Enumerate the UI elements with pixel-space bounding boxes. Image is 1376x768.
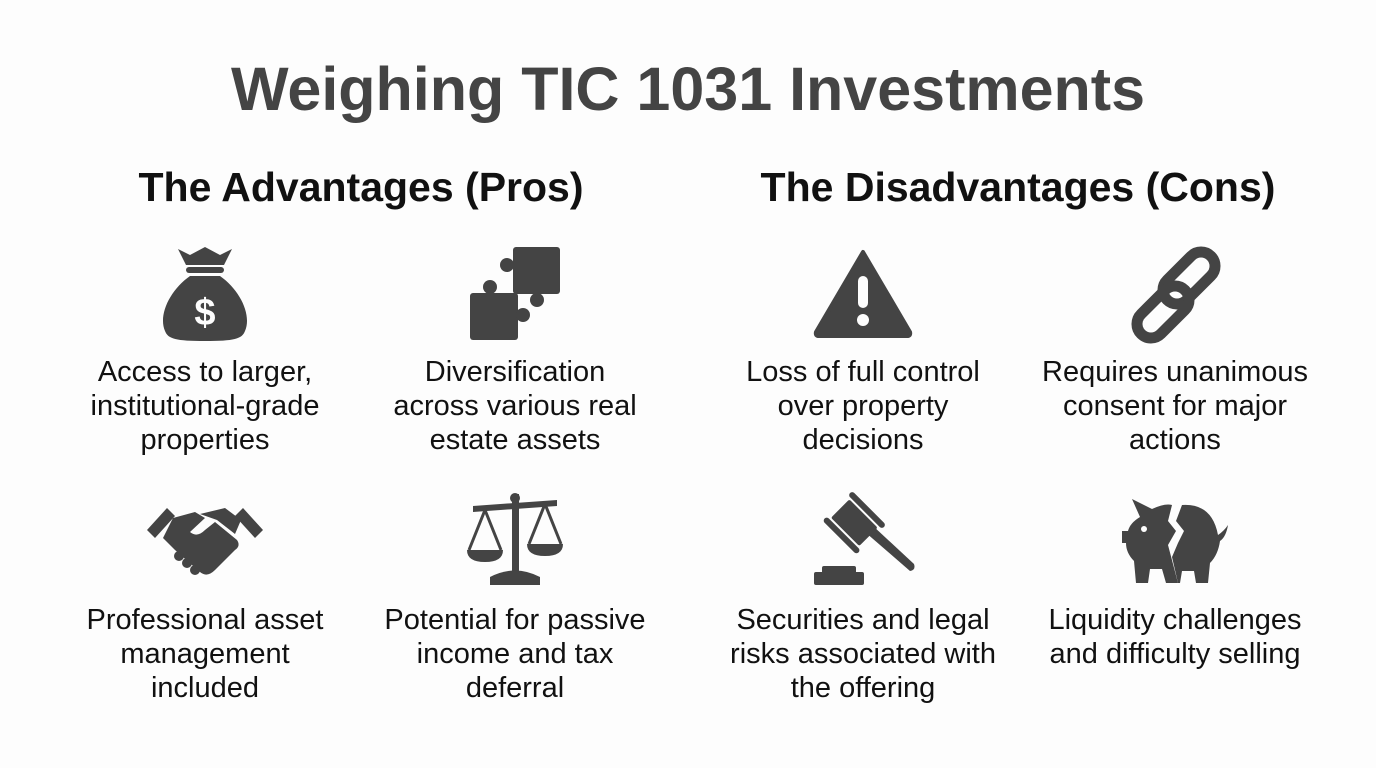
- text: diversification: estate assets: [430, 424, 600, 456]
- text: liquidity: [1048, 604, 1302, 670]
- text: professional: [87, 604, 324, 704]
- heading: cons: The Disadvantages (Cons): [761, 164, 1275, 210]
- text: securities: Securities and legal: [736, 604, 990, 636]
- text: unanimous: [1042, 356, 1308, 456]
- text: loss of control: Loss of full control: [746, 356, 980, 388]
- text: securities: the offering: [791, 672, 935, 704]
- text: loss of control: decisions: [803, 424, 923, 456]
- text: loss of control: [746, 356, 980, 456]
- text: unanimous: consent for major: [1063, 390, 1287, 422]
- icon: money bag: $: [194, 292, 216, 334]
- text: passive income: Potential for passive: [384, 604, 646, 636]
- icon: chain: [1132, 246, 1220, 344]
- title: Weighing TIC 1031 Investments: [231, 55, 1145, 123]
- icon: warning: [814, 250, 912, 338]
- text: professional: Professional asset: [87, 604, 323, 636]
- text: access: Access to larger,: [98, 356, 312, 388]
- text: access: [91, 356, 319, 456]
- text: liquidity: Liquidity challenges: [1048, 604, 1302, 636]
- icon: broken piggy bank: [1122, 499, 1228, 583]
- text: passive income: deferral: [466, 672, 564, 704]
- heading: pros: The Advantages (Pros): [138, 164, 584, 210]
- text: unanimous: Requires unanimous: [1042, 356, 1308, 388]
- icon: handshake: [147, 508, 263, 575]
- icon: money bag: [163, 247, 247, 341]
- text: access: properties: [141, 424, 269, 456]
- icon: gavel: [814, 492, 914, 585]
- text: securities: [730, 604, 996, 704]
- icon: scales: [467, 493, 563, 585]
- text: passive income: [384, 604, 646, 704]
- text: access: institutional-grade: [91, 390, 319, 422]
- text: unanimous: actions: [1129, 424, 1221, 456]
- text: diversification: across various real: [393, 390, 637, 422]
- text: securities: risks associated with: [730, 638, 996, 670]
- icon: puzzle: [470, 247, 560, 340]
- text: passive income: income and tax: [417, 638, 613, 670]
- text: professional: management: [120, 638, 290, 670]
- text: diversification: [393, 356, 637, 456]
- text: professional: included: [151, 672, 259, 704]
- text: liquidity: and difficulty selling: [1050, 638, 1300, 670]
- text: diversification: Diversification: [425, 356, 605, 388]
- text: loss of control: over property: [778, 390, 948, 422]
